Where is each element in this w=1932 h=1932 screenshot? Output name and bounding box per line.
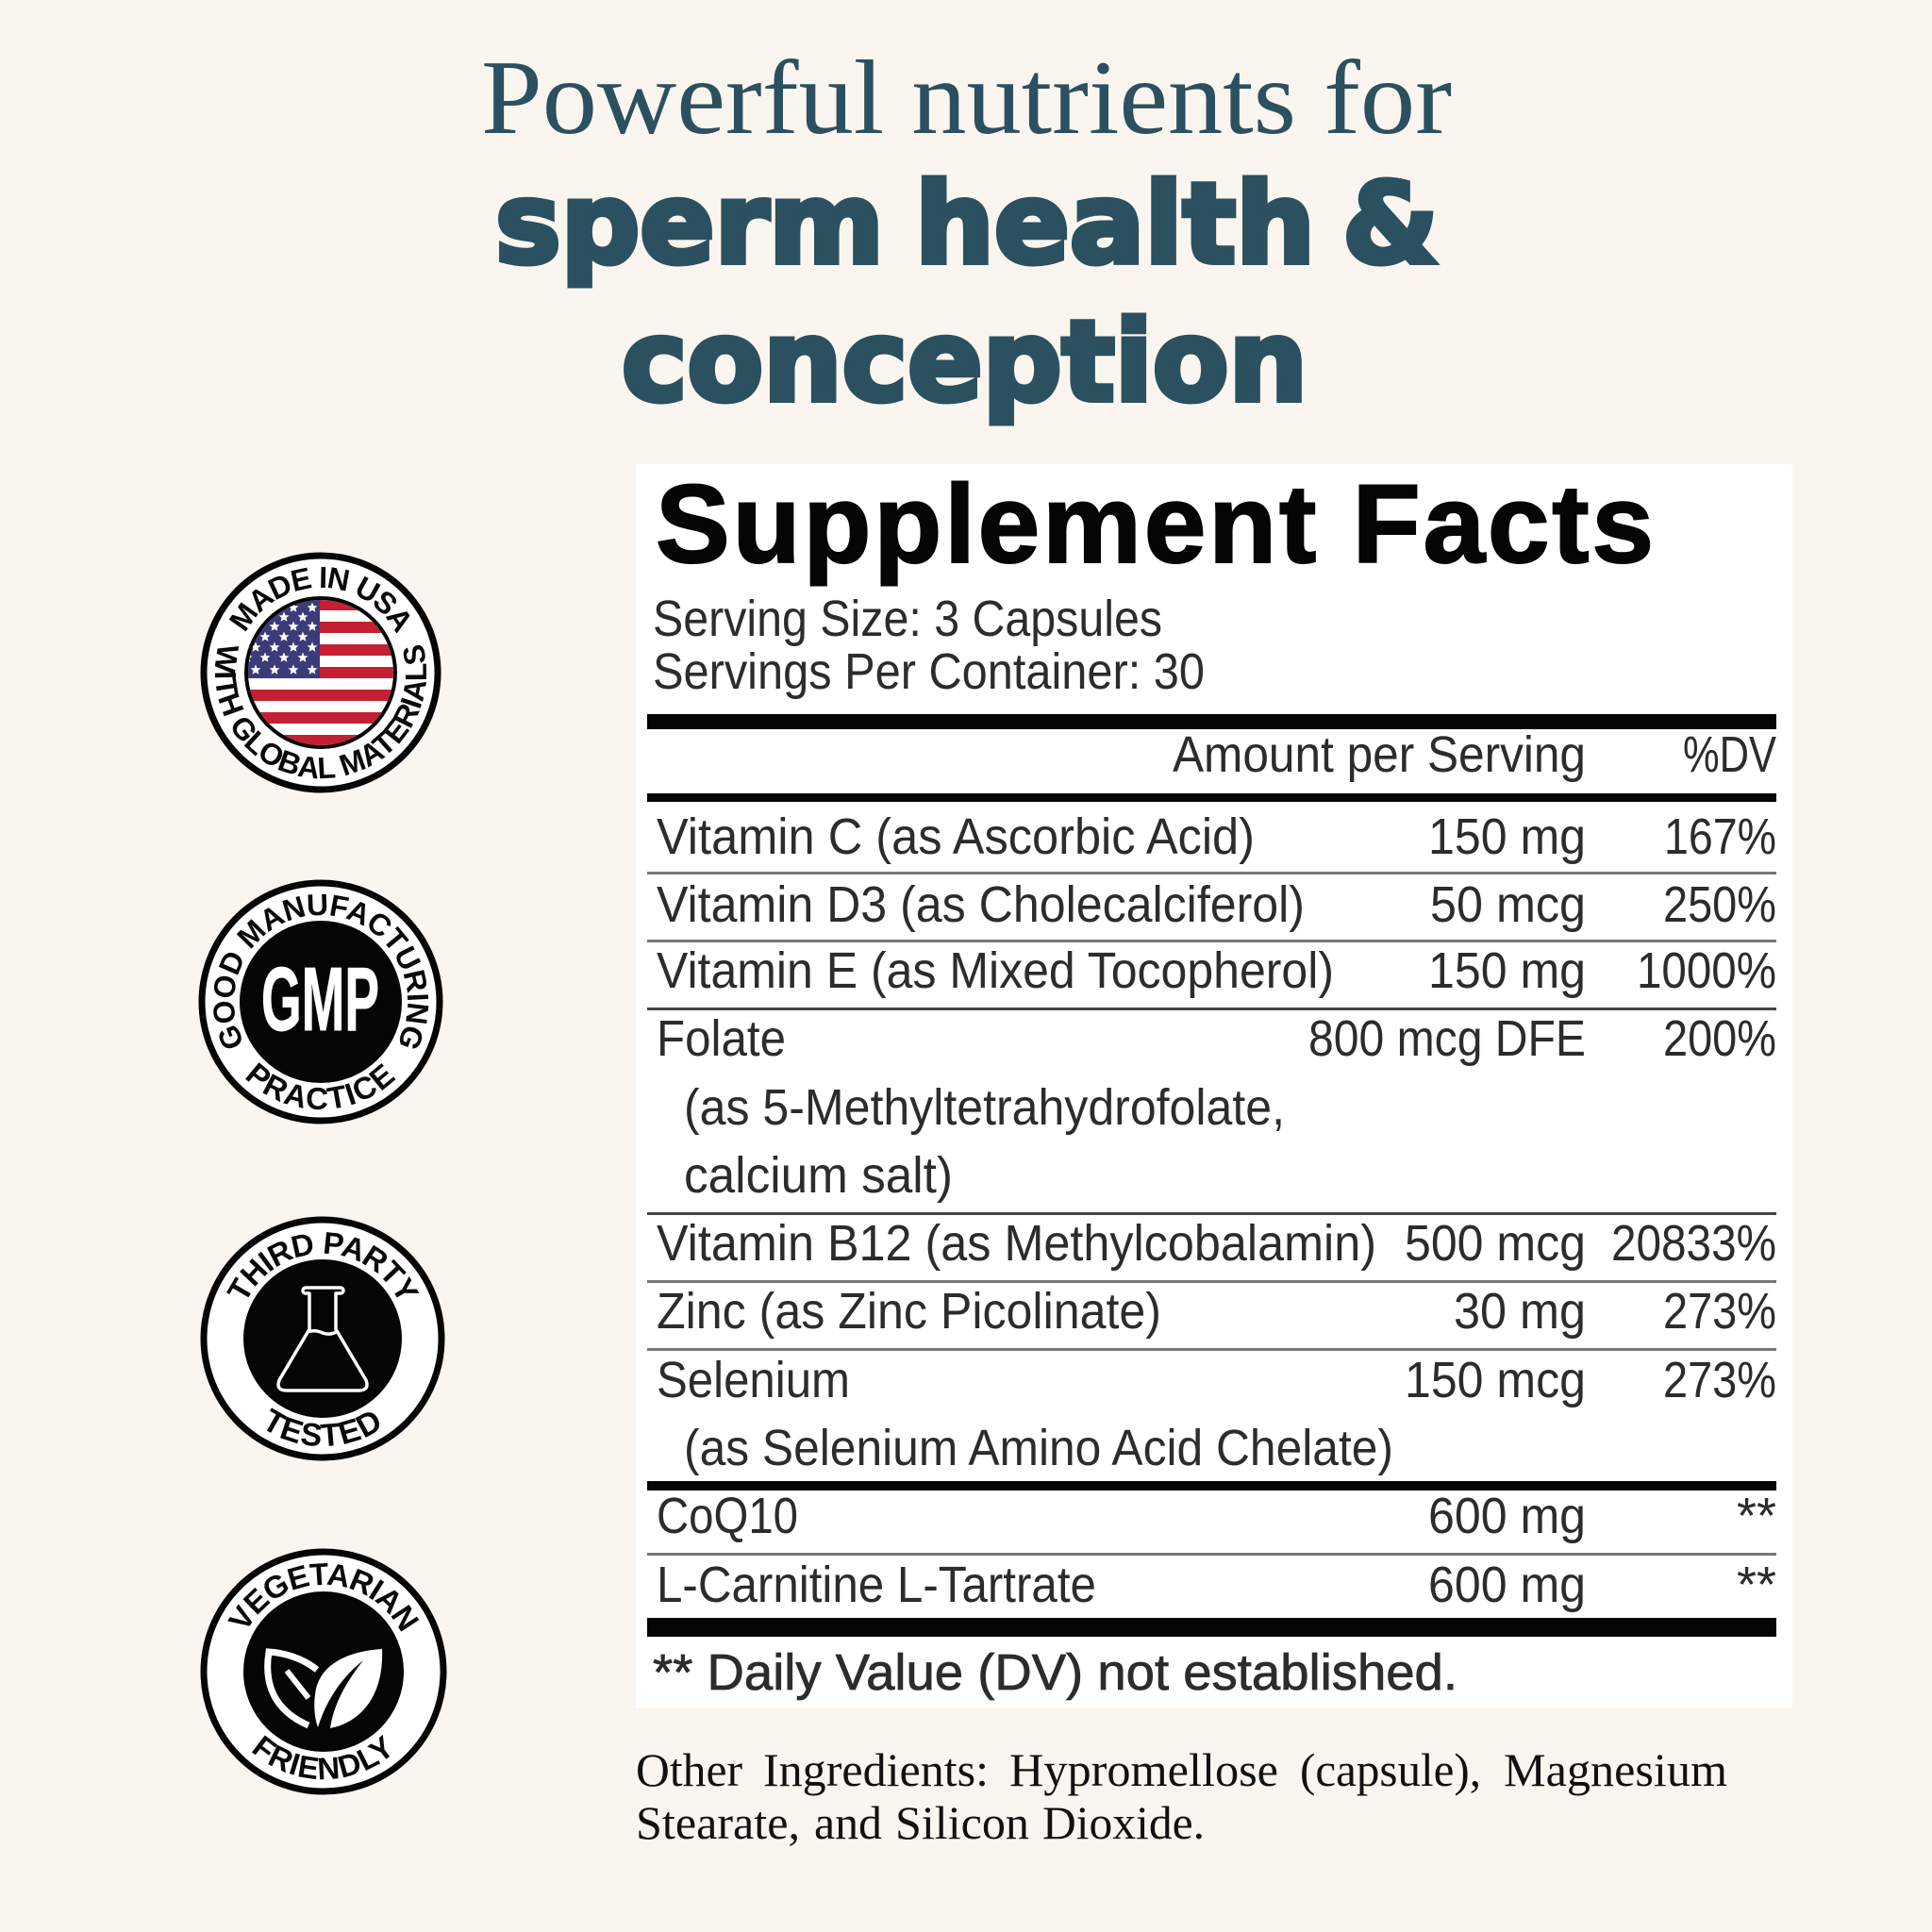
row: Selenium: 273%: [1663, 1352, 1776, 1408]
row: Vitamin D3: Vitamin D3 (as Cholecalciferol): [657, 876, 1305, 933]
row: Folate: calcium salt): [684, 1147, 953, 1204]
row: Folate: [657, 1010, 1776, 1204]
row: CoQ10: **: [1737, 1488, 1776, 1544]
row: Vitamin E: Vitamin E (as Mixed Tocopherol): [657, 942, 1334, 999]
serving info: [653, 591, 1205, 700]
heading: Supplement Facts: Supplement Facts: [656, 462, 1654, 587]
title: [481, 40, 1452, 426]
row: L-Carnitine L-Tartrate: **: [1737, 1557, 1776, 1613]
title line: sperm health &: sperm: [495, 158, 884, 289]
panel: supplement facts: [636, 462, 1792, 1708]
other ingredients: Ingredients:: [763, 1743, 989, 1796]
other ingredients: Hypromellose: [1009, 1743, 1278, 1796]
title line: sperm health &: health: [915, 158, 1315, 289]
title line: Powerful nutrients for: Powerful nutrients for: [481, 40, 1452, 157]
table rules: [647, 714, 1776, 1637]
serving info: Servings Per Container: 30: [653, 643, 1205, 700]
row: CoQ10: [657, 1488, 1776, 1544]
footnote: ** Daily Value (DV) not established.: [653, 1644, 1457, 1701]
other ingredients: Dioxide.: [1042, 1796, 1205, 1849]
title line: sperm health &: [495, 158, 1439, 289]
row: Vitamin E: 1000%: [1637, 942, 1776, 999]
GMP lettering: GMP: [261, 949, 379, 1050]
row: Folate: 800 mcg DFE: [1308, 1010, 1586, 1067]
row: Vitamin D3: [657, 876, 1776, 933]
title line: conception: conception: [622, 296, 1307, 426]
icon: flask: [278, 1288, 367, 1391]
badge text: Made in USA: MADE IN USA: [228, 567, 409, 634]
row: Zinc: Zinc (as Zinc Picolinate): [657, 1283, 1161, 1340]
table header: Amount per Serving: [1173, 726, 1586, 783]
icon: leaves: [268, 1649, 382, 1728]
row: Folate: (as 5-Methyltetrahydrofolate,: [684, 1079, 1285, 1136]
badge: GMP: [198, 879, 443, 1124]
other ingredients: Stearate,: [636, 1796, 800, 1849]
other ingredients: and: [814, 1796, 882, 1849]
row: Zinc: 273%: [1663, 1283, 1776, 1340]
row: Selenium: [657, 1352, 1776, 1476]
row: Selenium: 150 mcg: [1405, 1352, 1586, 1408]
row: Vitamin C: 150 mg: [1428, 808, 1586, 865]
title line: sperm health &: &: [1342, 158, 1439, 289]
badge text: good manufacturing: GOOD MANUFACTURING: [213, 894, 428, 1049]
row: Vitamin E: 150 mg: [1428, 942, 1586, 999]
other ingredients: [636, 1743, 1727, 1849]
row: Vitamin B12: [657, 1215, 1776, 1272]
row: Folate: 200%: [1663, 1010, 1776, 1067]
badge text: vegetarian: VEGETARIAN: [227, 1562, 419, 1632]
table header: %DV: [1683, 726, 1776, 783]
other ingredients: Other: [636, 1743, 742, 1796]
row: L-Carnitine L-Tartrate: L-Carnitine L-Tartrate: [657, 1557, 1096, 1613]
other ingredients: Magnesium: [1504, 1743, 1727, 1796]
badge: third party tested: [200, 1217, 445, 1460]
row: L-Carnitine L-Tartrate: 600 mg: [1428, 1557, 1586, 1613]
row: Vitamin C: 167%: [1664, 808, 1776, 865]
row: Vitamin B12: 20833%: [1611, 1215, 1776, 1272]
badge text: third party: THIRD PARTY: [226, 1232, 419, 1298]
row: Selenium: Selenium: [657, 1352, 850, 1408]
badge: Made in USA: [200, 553, 441, 792]
row: Folate: Folate: [657, 1010, 786, 1067]
row: CoQ10: CoQ10: [657, 1488, 798, 1544]
row: Vitamin D3: 250%: [1663, 876, 1776, 933]
row: Vitamin B12: Vitamin B12 (as Methylcobalamin): [657, 1215, 1376, 1272]
other ingredients: (capsule),: [1300, 1743, 1481, 1796]
row: Vitamin B12: 500 mcg: [1405, 1215, 1586, 1272]
row: Vitamin D3: 50 mcg: [1430, 876, 1586, 933]
serving info: Serving Size: 3 Capsules: [653, 591, 1162, 647]
row: Vitamin C: Vitamin C (as Ascorbic Acid): [657, 808, 1255, 865]
row: Vitamin E: [657, 942, 1776, 999]
other ingredients: Silicon: [895, 1796, 1029, 1849]
row: Zinc: [657, 1283, 1776, 1340]
badge: vegetarian friendly: [200, 1549, 447, 1794]
row: Vitamin C: [657, 808, 1776, 865]
row: CoQ10: 600 mg: [1428, 1488, 1586, 1544]
badge text: tested: TESTED: [266, 1407, 379, 1446]
badge text: friendly: FRIENDLY: [252, 1735, 390, 1779]
row: Zinc: 30 mg: [1454, 1283, 1586, 1340]
badge text: with global materials: WITH GLOBAL MATERIALS: [215, 645, 426, 779]
icon: US flag: [241, 594, 401, 755]
row: L-Carnitine L-Tartrate: [657, 1557, 1776, 1613]
row: Selenium: (as Selenium Amino Acid Chelate): [684, 1420, 1393, 1476]
badge text: practice: PRACTICE: [245, 1062, 396, 1109]
